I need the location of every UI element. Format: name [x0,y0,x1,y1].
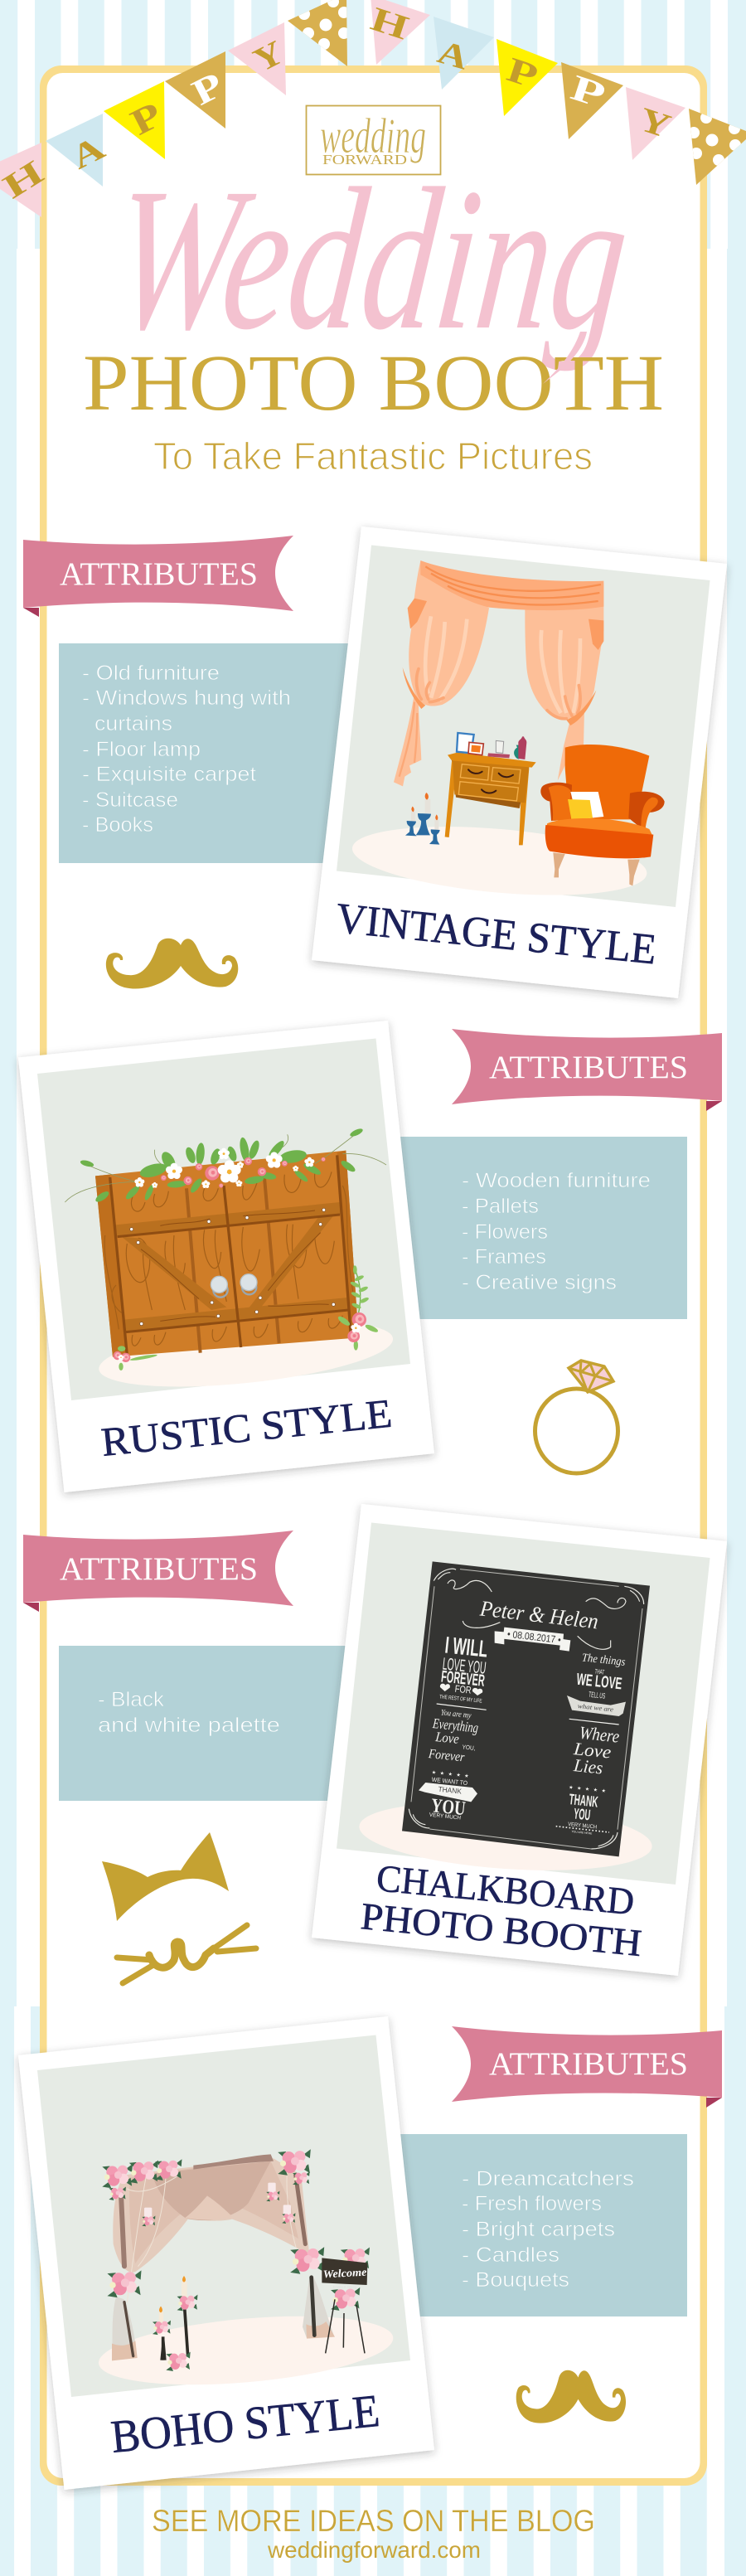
attributes list: chalkboard: and white palette [98,1714,280,1737]
caption: chalkboard photo booth: PHOTO BOOTH [359,1894,643,1964]
illustration: boho arch [96,2149,396,2395]
attributes list: vintage: - Books [82,813,153,837]
illustration: chalkboard sign: Lies [572,1755,603,1778]
caption: boho style: BOHO STYLE [109,2385,382,2463]
attributes list: vintage: - Exquisite carpet [82,763,256,786]
attributes list: rustic: - Flowers [462,1220,548,1244]
photo card: boho style [18,2016,434,2490]
illustration: chalkboard sign: • 08.08.2017 • [506,1628,561,1646]
ribbon: attributes boho: ATTRIBUTES [489,2046,688,2082]
illustration: chalkboard sign [402,1561,650,1856]
ribbon: attributes chalkboard: ATTRIBUTES [60,1551,258,1587]
bunting: right HAPPY [366,0,746,185]
attributes list: vintage: - Windows hung with [82,686,291,710]
icon: cat ears [102,1832,229,1921]
icon: diamond ring [535,1361,618,1473]
illustration: chalkboard sign: THANK [569,1790,599,1811]
illustration: chalkboard sign: ★ ★ ★ ★ ★ [569,1784,606,1794]
attributes list: boho: - Fresh flowers [462,2192,602,2215]
illustration: chalkboard sign: WE WANT TO [431,1776,468,1787]
icon: moustache [106,939,238,989]
bunting: right HAPPY: A [434,33,472,77]
ribbon: attributes rustic [452,1029,722,1111]
attributes list: vintage [82,662,291,837]
bunting: left HAPPY: P [124,95,168,143]
attributes list: boho: - Bouquets [462,2268,569,2292]
bunting: right HAPPY: P [566,67,610,116]
illustration: chalkboard sign: Love [434,1729,460,1747]
bunting: left HAPPY: A [65,129,110,177]
illustration: chalkboard sign: Forever [427,1747,466,1765]
illustration: chalkboard sign: TELL US [589,1691,606,1700]
bunting: left HAPPY: Y [247,33,289,80]
illustration: chalkboard sign: YOU, [462,1743,476,1752]
caption: chalkboard photo booth: CHALKBOARD [375,1856,636,1923]
illustration: vintage room [350,560,665,905]
attributes list: vintage: - Floor lamp [82,738,201,761]
ribbon: attributes rustic: ATTRIBUTES [489,1050,688,1085]
illustration: chalkboard sign: Love [572,1739,613,1763]
illustration: chalkboard sign: You are my [440,1708,472,1720]
attributes panel: chalkboard [59,1646,357,1801]
illustration: chalkboard sign: ★ ★ ★ ★ ★ [431,1769,469,1779]
illustration: boho arch: Emma & Grecg [333,2285,356,2288]
bunting: left HAPPY: P [186,65,230,114]
photo card: vintage style [312,526,727,998]
logo: Wedding Forward: wedding [320,109,426,163]
illustration: chalkboard sign: FOR [454,1683,472,1696]
attributes list: boho: - Dreamcatchers [462,2167,634,2190]
attributes list: chalkboard [98,1688,280,1737]
illustration: boho arch: Welcome [322,2266,367,2280]
attributes list: chalkboard: - Black [98,1688,165,1711]
caption: rustic style: RUSTIC STYLE [99,1390,394,1465]
footer call to action: SEE MORE IDEAS ON THE BLOG [152,2504,595,2538]
caption: vintage style: VINTAGE STYLE [334,895,659,973]
ribbon: attributes vintage [23,536,293,617]
illustration: chalkboard sign: YOU [430,1795,467,1820]
title: Photo Booth: PHOTO BOOTH [83,338,664,427]
footer website: weddingforward.com [267,2537,481,2563]
attributes panel: boho [390,2134,687,2316]
caption: chalkboard photo booth [359,1856,643,1964]
illustration: chalkboard sign: THE REST OF MY LIFE [439,1694,482,1705]
photo card: chalkboard photo booth [312,1504,727,1976]
attributes list: rustic [462,1169,651,1294]
title: Wedding: Wedding [104,146,638,372]
attributes list: rustic: - Wooden furniture [462,1169,651,1192]
illustration: chalkboard sign: LOVE YOU [442,1654,487,1678]
icon: cat whiskers [117,1925,256,1983]
attributes list: rustic: - Creative signs [462,1271,617,1294]
illustration: chalkboard sign: VERY MUCH [429,1812,461,1822]
illustration: chalkboard sign: THAT [594,1667,605,1676]
attributes panel: vintage [59,643,357,863]
pink script tail overlap [543,332,587,384]
attributes list: rustic: - Pallets [462,1195,539,1218]
illustration: chalkboard sign: VERY MUCH [568,1822,597,1831]
illustration: chalkboard sign: Everything [432,1715,479,1736]
ribbon: attributes boho [452,2026,722,2108]
illustration: chalkboard sign: The things [581,1652,627,1669]
bunting: right HAPPY: P [502,50,543,96]
attributes list: boho: - Bright carpets [462,2218,615,2241]
illustration: chalkboard sign: I WILL [443,1632,489,1663]
bunting: left HAPPY [0,0,350,217]
photo card: rustic style [18,1021,434,1492]
illustration: chalkboard sign: FOREVER [440,1667,486,1691]
bunting: right HAPPY: H [366,0,413,46]
attributes panel: rustic [390,1137,687,1319]
illustration: chalkboard sign: Where [579,1723,621,1747]
attributes list: boho: - Candles [462,2244,560,2267]
illustration: chalkboard sign: Peter & Helen [478,1595,599,1634]
illustration: chalkboard sign: what we are [577,1702,614,1714]
icon: moustache [516,2370,626,2423]
attributes list: rustic: - Frames [462,1245,546,1269]
bunting: right HAPPY: Y [634,101,676,146]
logo: Wedding Forward [307,106,441,174]
attributes list: vintage: - Suitcase [82,788,178,812]
ribbon: attributes vintage: ATTRIBUTES [60,556,258,592]
attributes list: boho [462,2167,634,2292]
attributes list: vintage: curtains [94,712,172,735]
logo: Wedding Forward: FORWARD [322,152,407,167]
subtitle: To Take Fantastic Pictures [153,434,593,478]
illustration: chalkboard sign: YOU ARE HERE [571,1830,593,1836]
illustration: chalkboard sign: WE LOVE [575,1671,622,1693]
illustration: chalkboard sign: YOU [573,1804,591,1823]
attributes list: vintage: - Old furniture [82,662,220,685]
ribbon: attributes chalkboard [23,1531,293,1612]
illustration: barn doors [65,1127,396,1398]
illustration: chalkboard sign: THANK [438,1785,463,1796]
